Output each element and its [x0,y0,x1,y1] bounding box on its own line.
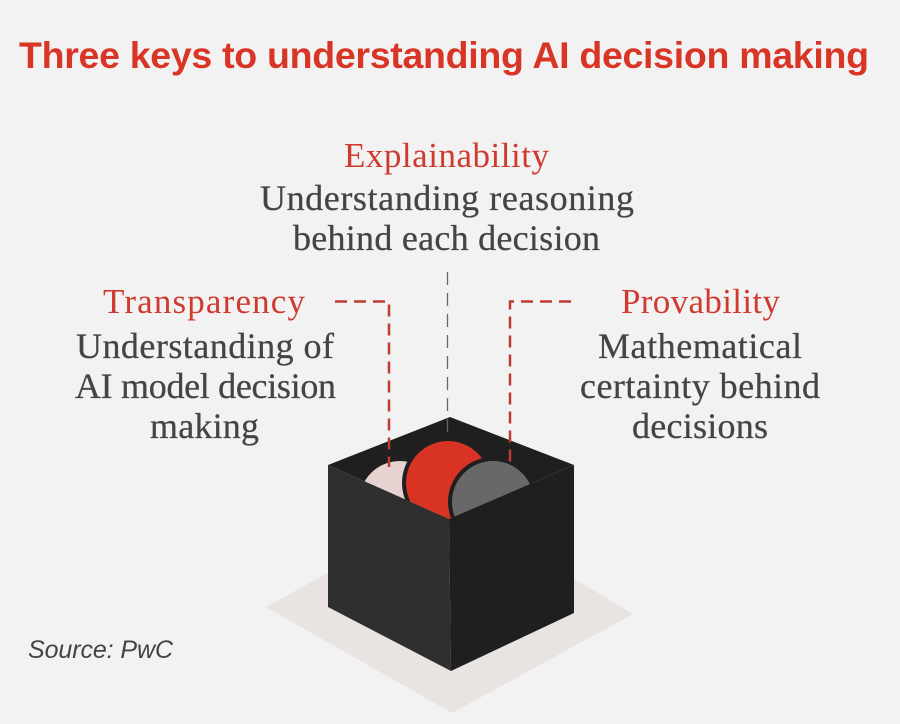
description: behind each decision [293,218,600,258]
heading: Transparency [103,282,306,321]
label: explainability [260,136,634,258]
description: Understanding of [76,326,334,366]
description: making [150,406,259,446]
disc: explainability [402,441,489,519]
connector: provability [510,302,571,463]
description [580,326,820,446]
source: Source: PwC [28,636,174,664]
box right face [449,465,574,671]
description: Mathematical [598,326,802,366]
illustration: open black box with three discs [328,417,574,671]
description: certainty behind [580,366,820,406]
connector: transparency [335,302,389,467]
box left face [328,465,451,671]
description [75,326,336,446]
title: Three keys to understanding AI decision making [19,34,869,76]
disc: provability [448,458,533,518]
description: decisions [632,406,768,446]
disc: transparency [364,461,439,514]
label: transparency [75,282,336,446]
heading: Explainability [344,136,550,175]
connector: explainability [446,272,448,440]
heading: Provability [621,282,780,321]
description: Understanding reasoning [260,178,634,218]
description: AI model decision [75,366,336,406]
description [260,178,634,258]
illustration: floor shadow [266,505,633,713]
box interior [328,417,574,519]
label: provability [580,282,820,446]
